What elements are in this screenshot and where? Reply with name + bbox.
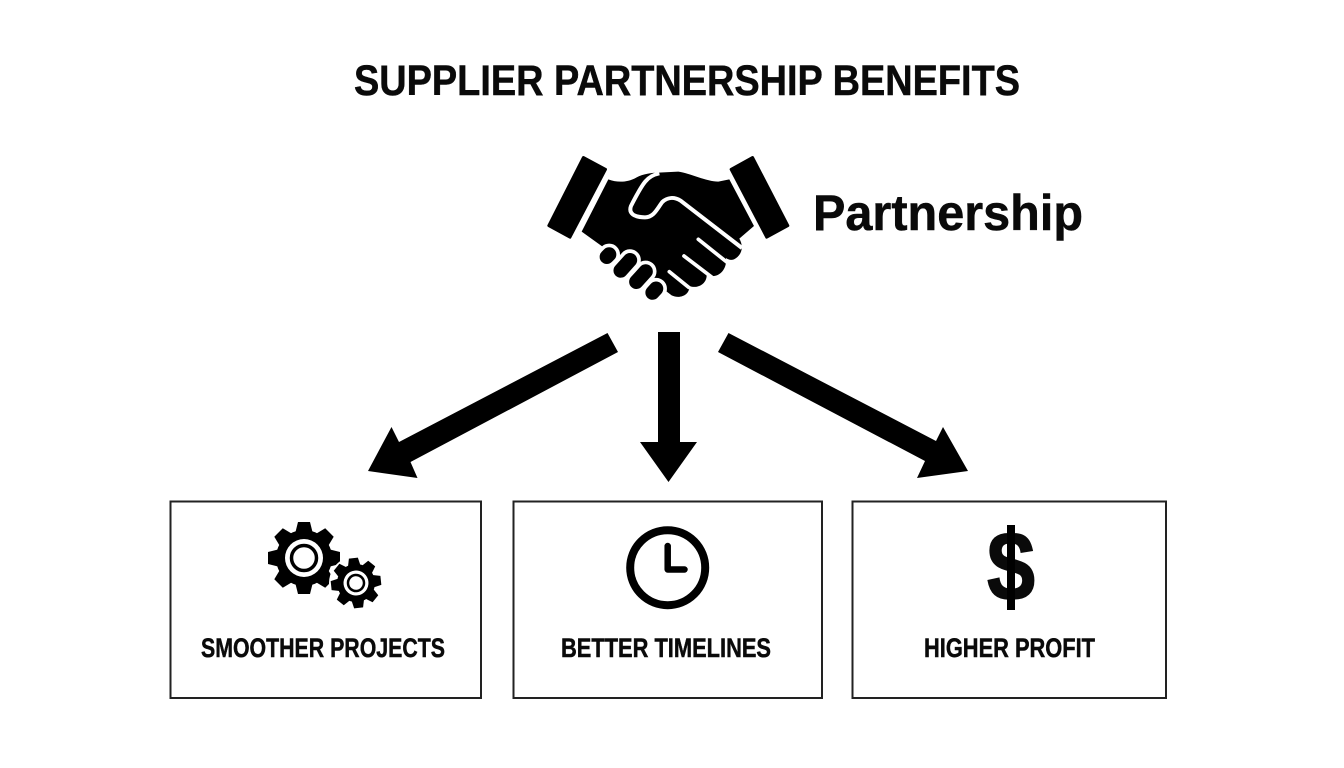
icon: dollar sign: $	[987, 511, 1035, 621]
icon: clock	[630, 530, 705, 605]
label: better timelines: BETTER TIMELINES	[561, 633, 771, 663]
title: SUPPLIER PARTNERSHIP BENEFITS	[354, 57, 1020, 105]
label: smoother projects: SMOOTHER PROJECTS	[201, 633, 445, 663]
panel: better timelines	[514, 502, 822, 698]
panel: higher profit	[852, 502, 1166, 698]
icon: gears	[268, 522, 386, 613]
arrow: center	[640, 332, 697, 482]
partnership label: Partnership	[813, 185, 1083, 241]
label: higher profit: HIGHER PROFIT	[924, 633, 1095, 663]
arrow: right	[718, 333, 968, 478]
arrow: left	[368, 333, 618, 478]
icon: handshake	[549, 157, 788, 305]
panel: smoother projects	[170, 502, 481, 698]
